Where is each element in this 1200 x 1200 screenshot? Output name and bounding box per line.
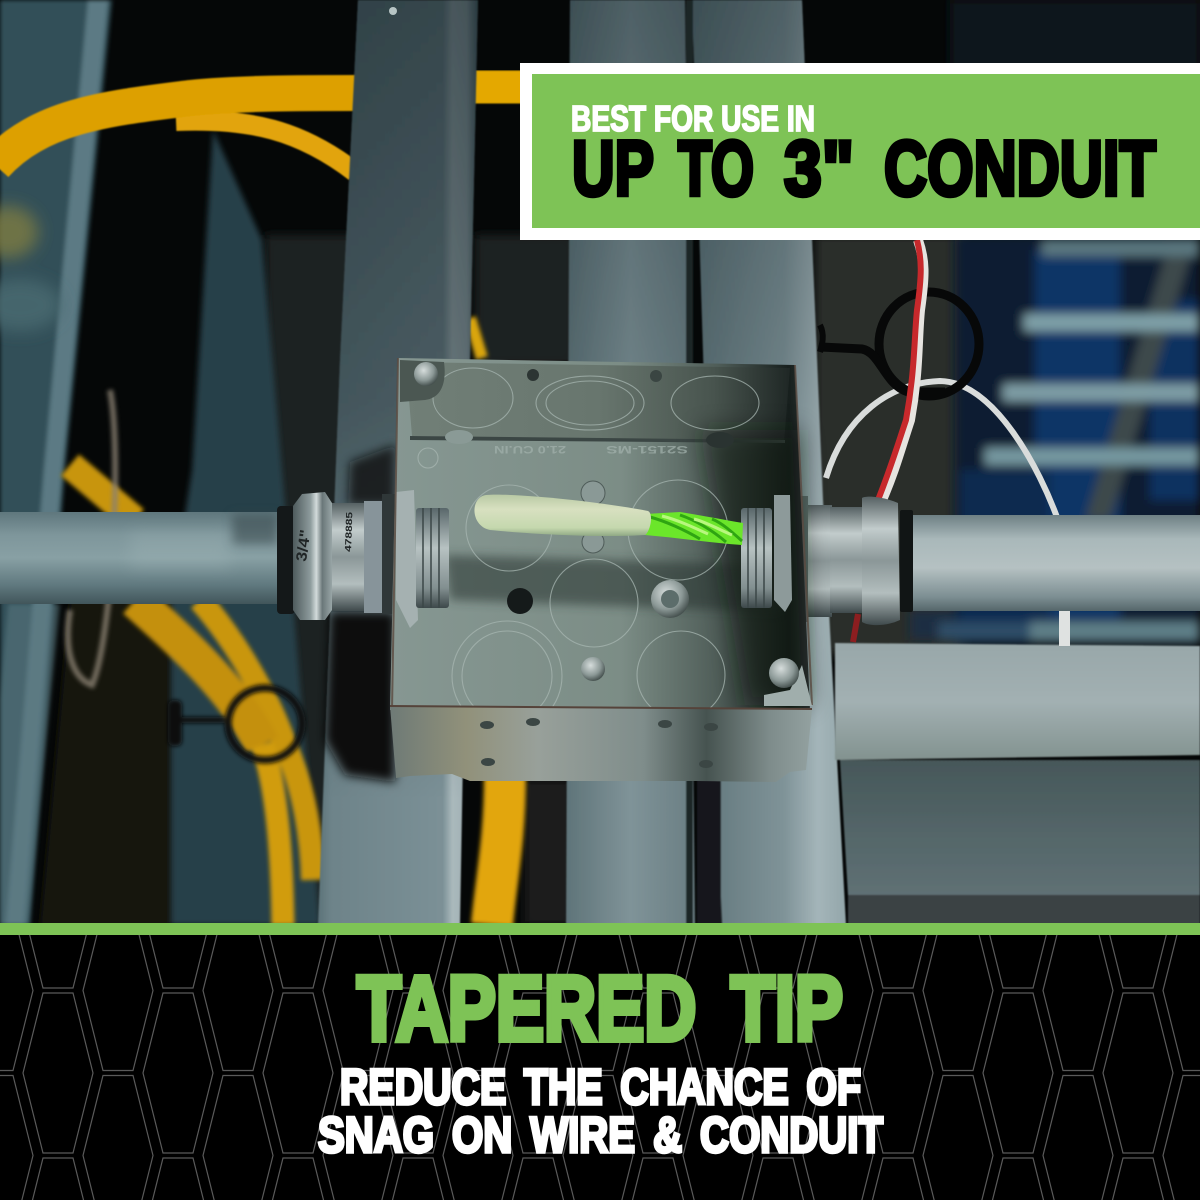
box screws (400, 360, 689, 618)
knockouts (418, 368, 759, 731)
metal raceway box lower right (835, 643, 1200, 925)
banner hexagon pattern (0, 935, 1200, 1200)
callout main text: TO (678, 124, 754, 212)
banner line one: REDUCE THE CHANCE OF (340, 1059, 861, 1115)
black ring hook (820, 292, 979, 396)
strut screw (389, 7, 397, 15)
box left fitting threads (396, 490, 449, 628)
box front wall (390, 706, 812, 782)
bottom banner (0, 923, 1200, 1200)
corner tab (764, 665, 812, 706)
box stamped text (494, 443, 688, 455)
strut shadow left of box (325, 445, 395, 782)
callout main text: 3" (784, 124, 854, 212)
box right fitting threads (741, 495, 792, 612)
callout main text: UP (572, 124, 654, 212)
steel ring left (68, 390, 115, 685)
banner heading: TAPERED TIP (357, 958, 843, 1060)
banner green stripe (0, 923, 1200, 935)
left blue-gray panel (40, 130, 320, 925)
box holes and bosses (445, 369, 734, 681)
white wire lower (1059, 608, 1070, 646)
banner black background (0, 935, 1200, 1200)
shadow band across floor (445, 555, 780, 612)
photo background (0, 0, 1200, 925)
callout white frame (520, 63, 1200, 240)
callout eyebrow text: BEST FOR USE IN (571, 98, 815, 139)
blue cable tray, blurred (910, 0, 1200, 645)
left steel beam (0, 0, 112, 925)
box top wall (406, 362, 790, 442)
back wall (265, 235, 965, 925)
red and white wire (853, 240, 924, 642)
photo: conduit junction box scene (0, 0, 1200, 925)
callout green panel (532, 74, 1200, 228)
callout: best for use in (520, 63, 1200, 240)
junction box (390, 358, 812, 782)
coupler size marking: 3/4" (293, 529, 314, 563)
left light band on beam lower (0, 604, 60, 925)
left coupler (277, 492, 396, 620)
yellow cables upper (0, 87, 530, 172)
right conduit (792, 496, 1200, 625)
banner line two: SNAG ON WIRE & CONDUIT (318, 1107, 883, 1163)
box stamped text: S2151-MS (606, 443, 688, 455)
box stamped text: 21.0 CU.IN (494, 443, 566, 455)
left conduit (0, 492, 396, 620)
steel struts (318, 0, 846, 925)
white wire (826, 381, 1058, 520)
yellow cables lower (70, 318, 505, 925)
front wall holes (480, 718, 718, 768)
box rim edges (392, 358, 812, 710)
green wire twist (645, 512, 743, 545)
right coupler (792, 496, 913, 625)
tapered tip (474, 495, 651, 536)
coupler part number: 478885 (343, 512, 354, 552)
callout main text (572, 124, 1156, 212)
box interior floor (390, 358, 810, 710)
beam reflections (0, 206, 62, 331)
black cable clip (168, 688, 302, 760)
